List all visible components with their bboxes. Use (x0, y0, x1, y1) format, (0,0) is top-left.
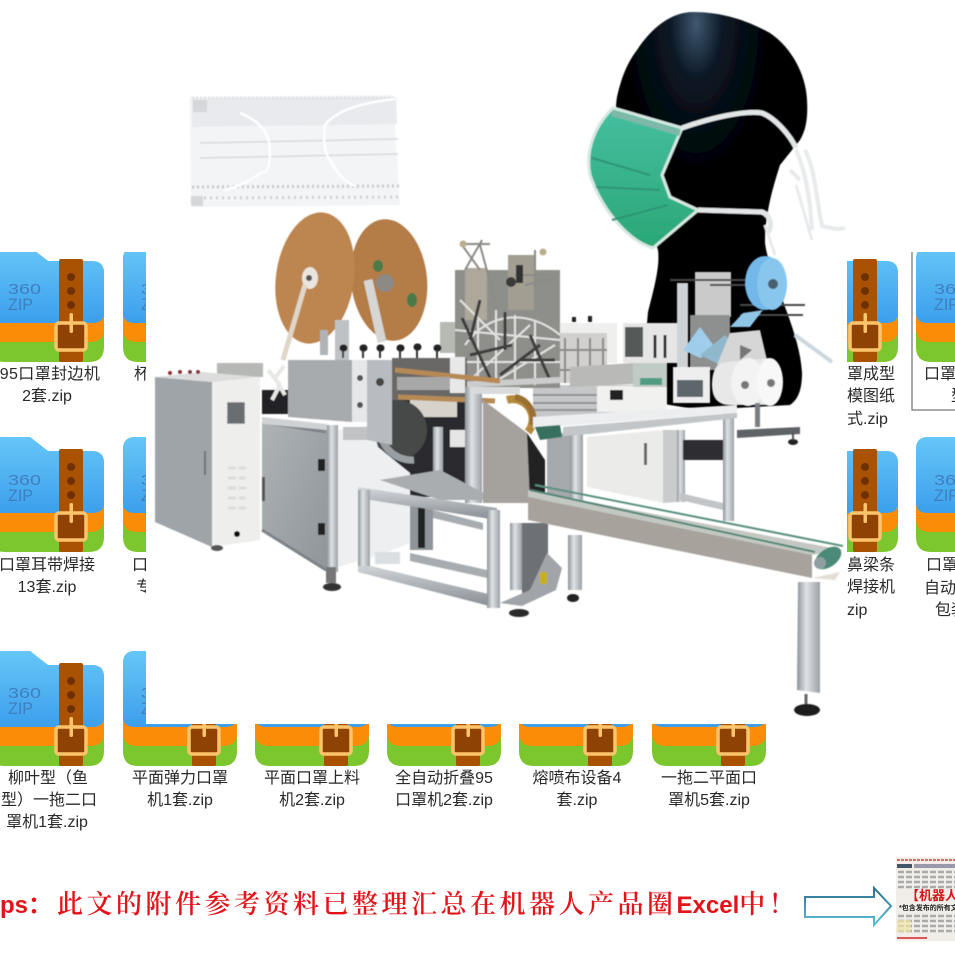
file icon row 2 column 2 (123, 437, 237, 552)
file label: N95 edge sealer: 95口罩封边机 (0, 365, 100, 383)
central frame, brown belts and rollers (367, 357, 520, 550)
file icon row 3 column 1: 360 (8, 685, 41, 702)
paper reels (267, 207, 438, 360)
top box (262, 390, 288, 414)
file icon right column row 2 (784, 437, 898, 552)
file label: one-drag-two flat mask machine: 罩机5套.zip (668, 791, 750, 809)
file label row 2 column 2: 专 (136, 578, 152, 596)
file label right column row 2: zip (847, 602, 868, 619)
file icon row 1: archive N95 edge sealer (0, 240, 110, 362)
central forming stations (440, 240, 677, 417)
conveyor legs (567, 535, 820, 716)
file icon row 3 column 2: 360 (141, 685, 174, 702)
footer note in red: 此文的附件参考资料已整理汇总在机器人产品圈Excel中！ (57, 890, 798, 919)
file label: flat mask feeder (264, 769, 360, 809)
file label: one-drag-two flat mask machine: 一拖二平面口 (661, 769, 757, 787)
file label: ear strap welder: 13套.zip (18, 578, 76, 596)
file label: melt-blown equipment (533, 769, 622, 809)
white photo background covering icons (146, 0, 847, 724)
file icon row 2 column 1: 360 (8, 472, 41, 489)
file label: fully automatic folding 95: 口罩机2套.zip (395, 791, 493, 809)
thumbnail of robot product Excel sheet (896, 857, 955, 941)
file icon row 3 column 2: ZIP (141, 699, 166, 718)
file icon far right row 2 (916, 437, 955, 552)
photo: flat white mask (190, 95, 400, 207)
file icon row 2 column 2: ZIP (141, 486, 166, 505)
surgical mask (589, 108, 698, 248)
file icon row 3 column 3 (255, 651, 369, 766)
file label: ear strap welder: 口罩耳带焊接 (0, 556, 95, 574)
file label: melt-blown equipment: 熔喷布设备4 (533, 769, 622, 787)
file icon right column row 1 (780, 240, 900, 362)
selected file frame (912, 252, 955, 410)
file icon row 3 column 6 (652, 651, 766, 766)
arrow pointing to thumbnail (805, 888, 891, 925)
file icon row 1: archive N95 edge sealer: 360 (8, 281, 41, 298)
mannequin head (616, 12, 807, 410)
photo: mask production machine (155, 207, 845, 716)
file label: willow leaf mask machine (1, 769, 97, 831)
file icon row 1 column 2: 360 (141, 281, 174, 298)
output conveyor (528, 485, 845, 580)
file label row 2 column 2 (132, 557, 152, 596)
file icon row 3 column 2 (123, 651, 237, 766)
file label right column row 1: 模图纸 (847, 387, 895, 405)
file label right column row 2: 焊接机 (847, 578, 895, 596)
file icon row 1 column 2: ZIP (141, 295, 166, 314)
file icon row 2 column 1: ZIP (8, 486, 33, 505)
control cabinet (155, 370, 260, 551)
file label far right row 1 (924, 366, 955, 405)
file label right column row 1: 式.zip (847, 410, 888, 428)
file label: melt-blown equipment: 套.zip (557, 791, 598, 809)
file label: flat elastic mask machine: 机1套.zip (147, 791, 213, 809)
file label right column row 1 (847, 365, 895, 428)
right unwinding section (670, 256, 805, 445)
file label: one-drag-two flat mask machine (661, 769, 757, 809)
file label: N95 edge sealer: 2套.zip (22, 387, 72, 405)
file label: willow leaf mask machine: 罩机1套.zip (6, 813, 88, 831)
file label row 1 column 2: 杯 (134, 365, 150, 383)
file label: ear strap welder (0, 556, 95, 596)
hood and lower leg (483, 397, 562, 617)
file icon row 2 column 2: 360 (141, 472, 174, 489)
file label right column row 1: 罩成型 (847, 365, 895, 383)
file label: N95 edge sealer (0, 365, 100, 405)
file label: flat elastic mask machine: 平面弹力口罩 (132, 769, 228, 787)
file label: willow leaf mask machine: 柳叶型（鱼 (8, 769, 88, 787)
file label: flat elastic mask machine (132, 769, 228, 809)
file label: willow leaf mask machine: 型）一拖二口 (1, 791, 97, 809)
upper conveyor (533, 405, 737, 523)
file icon row 1 column 2 (120, 240, 240, 362)
file label right column row 2 (847, 556, 895, 619)
file icon row 2 column 1 (0, 437, 104, 552)
file label row 2 column 2: 口 (132, 557, 148, 574)
file icon row 3 column 4 (387, 651, 501, 766)
second cabinet (217, 360, 410, 591)
file icon row 1: archive N95 edge sealer: ZIP (8, 295, 33, 314)
photo: mannequin head wearing green mask (589, 12, 845, 410)
file label: fully automatic folding 95: 全自动折叠95 (395, 769, 493, 787)
file label right column row 2: 鼻梁条 (847, 556, 895, 574)
file icon far right row 1 (912, 240, 955, 362)
file label: flat mask feeder: 机2套.zip (279, 791, 345, 809)
file icon row 3 column 1 (0, 651, 104, 766)
file icon row 3 column 1: ZIP (8, 699, 33, 718)
file label: fully automatic folding 95 (395, 769, 493, 809)
file icon row 3 column 5 (519, 651, 633, 766)
file label far right row 2 (924, 557, 955, 619)
front aluminium table frame (358, 470, 500, 608)
tie straps (682, 112, 796, 148)
file label: flat mask feeder: 平面口罩上料 (264, 769, 360, 787)
